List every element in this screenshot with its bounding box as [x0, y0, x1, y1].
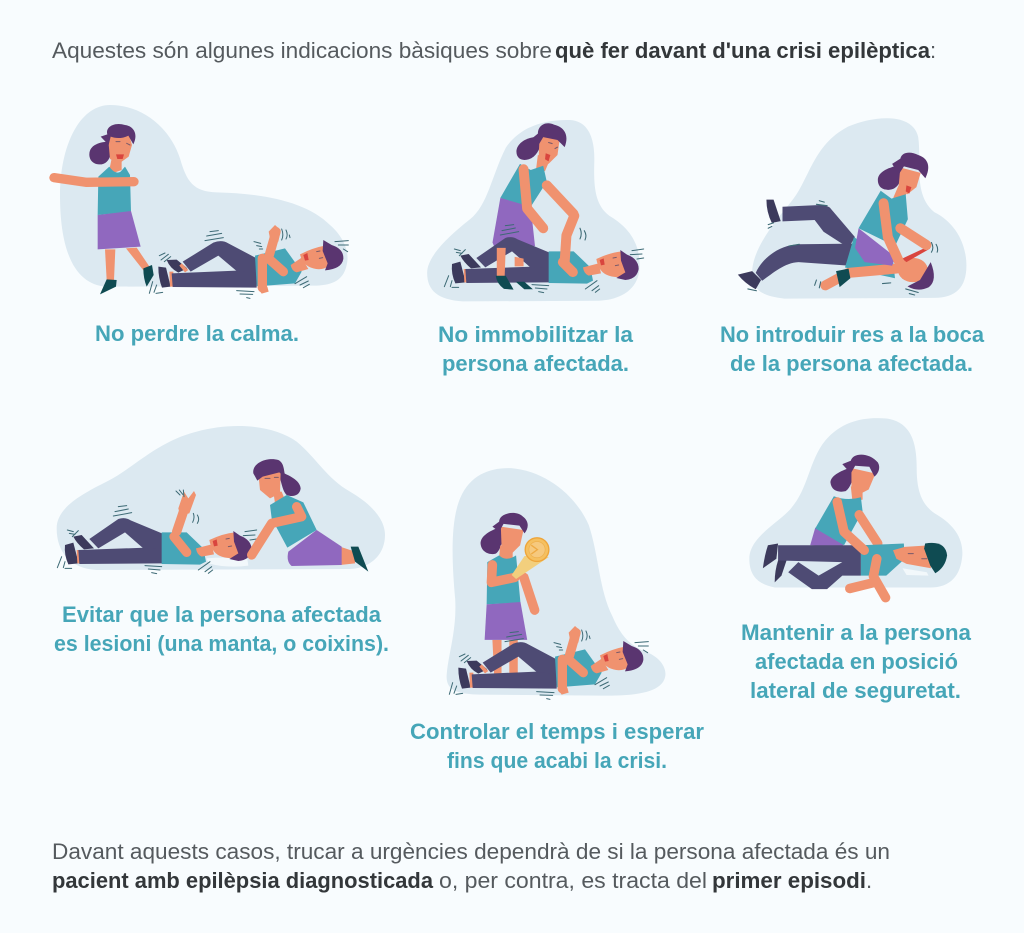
woman kneeling [252, 459, 368, 572]
woman leaning over [492, 123, 574, 249]
man in recovery position [763, 543, 947, 598]
closing text: Davant aquests casos, trucar a urgències dependrà de si la persona afectada és un [52, 839, 890, 864]
blob background [427, 120, 640, 301]
caption: afectada en posició [755, 649, 958, 674]
scene: no introduir res a la boca [738, 118, 966, 299]
blob background [752, 118, 966, 299]
caption: Mantenir a la persona [741, 620, 972, 645]
caption: lateral de seguretat. [750, 678, 961, 703]
woman's arm over man [837, 502, 864, 550]
caption [54, 602, 389, 656]
woman with clock [481, 513, 535, 674]
intro text: què fer davant d'una crisi epilèptica [555, 38, 931, 63]
caption: Controlar el temps i esperar [410, 719, 704, 744]
scene: controlar el temps [447, 468, 665, 696]
icon: clock with light beam [512, 538, 549, 579]
man having seizure [149, 225, 348, 298]
closing text [52, 839, 890, 893]
man on floor [738, 200, 934, 290]
caption [720, 322, 985, 376]
shake marks [748, 201, 938, 295]
caption: de la persona afectada. [730, 351, 973, 376]
intro text [52, 38, 936, 63]
man lying on pillow [57, 490, 257, 574]
caption: persona afectada. [442, 351, 629, 376]
blob background [57, 426, 385, 570]
scene: evitar que es lesioni [57, 426, 385, 574]
caption [438, 322, 634, 376]
caption: No perdre la calma. [95, 321, 299, 346]
blob background [60, 105, 348, 287]
caption: No immobilitzar la [438, 322, 634, 347]
closing text: pacient amb epilèpsia diagnosticada [52, 868, 434, 893]
man on floor [449, 626, 648, 699]
caption: No introduir res a la boca [720, 322, 985, 347]
man lying, restrained [444, 225, 644, 293]
closing text: primer episodi [712, 868, 866, 893]
foreground details: legs and arm [496, 216, 586, 290]
closing text: o, per contra, es tracta del [439, 868, 707, 893]
scene: no perdre la calma [54, 105, 348, 298]
caption [741, 620, 972, 703]
woman kneeling over [855, 153, 928, 266]
woman standing [54, 124, 154, 294]
caption: fins que acabi la crisi. [447, 748, 667, 773]
caption [410, 719, 704, 773]
intro text: Aquestes són algunes indicacions bàsiques sobre [52, 38, 552, 63]
caption: es lesioni (una manta, o coixins). [54, 631, 389, 656]
caption: Evitar que la persona afectada [62, 602, 382, 627]
pillow [207, 558, 248, 567]
closing text: . [866, 868, 872, 893]
scene: posició lateral de seguretat [749, 418, 962, 598]
scene: no immobilitzar [427, 120, 640, 301]
woman kneeling [810, 455, 879, 547]
intro text: : [930, 38, 936, 63]
blob background [749, 418, 962, 587]
blob background [447, 468, 665, 696]
